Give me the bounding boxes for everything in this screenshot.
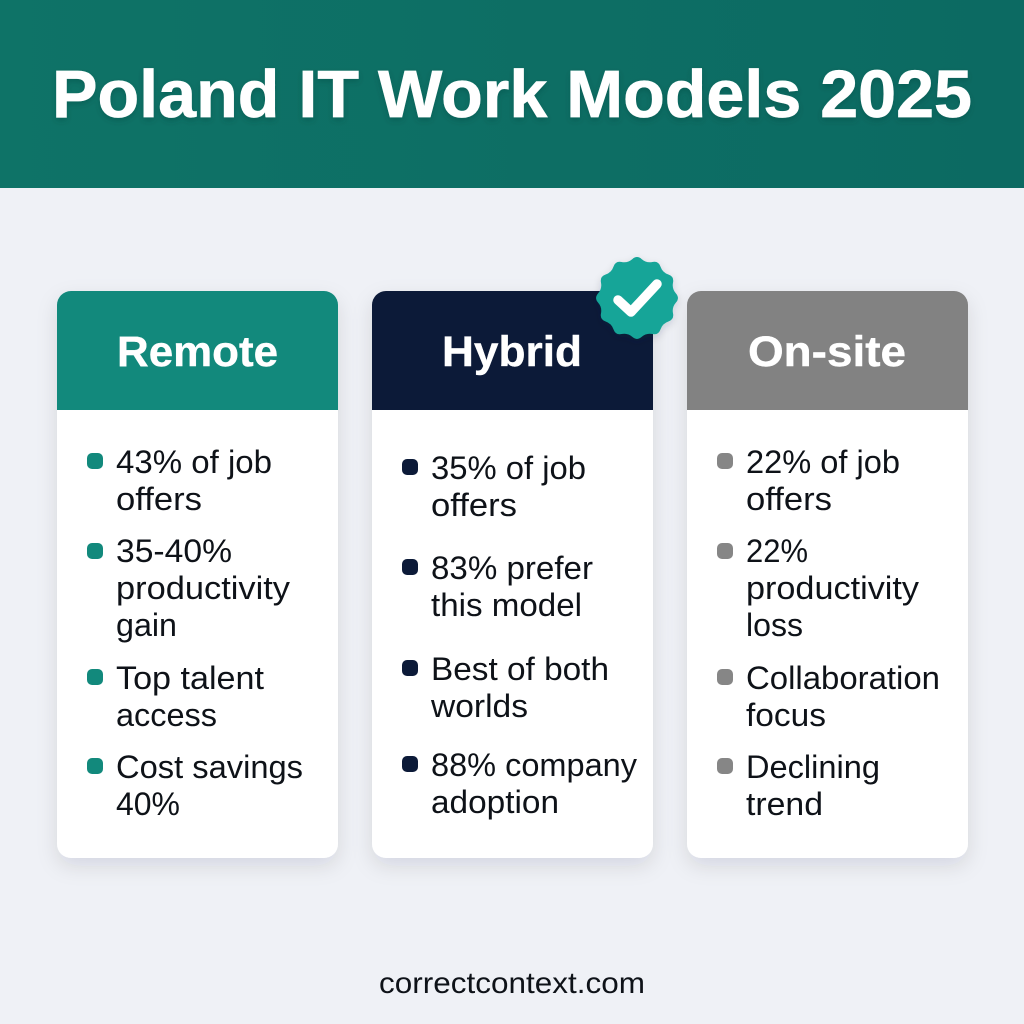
remote bullet list: productivity xyxy=(116,570,291,606)
remote bullet list: gain xyxy=(116,607,177,643)
remote bullet list: Top talent xyxy=(116,660,264,696)
hybrid bullet list: worlds xyxy=(430,688,528,724)
on-site bullet list: trend xyxy=(746,786,823,822)
hybrid header: Hybrid xyxy=(442,328,582,376)
footer website: correctcontext.com xyxy=(379,967,645,1000)
on-site bullet list: Collaboration xyxy=(746,660,940,696)
on-site bullet list: 22% xyxy=(746,533,808,569)
hybrid bullet list: this model xyxy=(431,587,582,623)
on-site header: On-site xyxy=(748,328,906,376)
hybrid bullet list: adoption xyxy=(431,784,559,820)
on-site bullet list: focus xyxy=(746,697,826,733)
on-site bullet list: offers xyxy=(746,481,832,517)
on-site bullet list: productivity xyxy=(746,570,920,606)
remote header: Remote xyxy=(117,328,278,376)
remote bullet list: 43% of job xyxy=(116,444,272,480)
on-site bullet list: Declining xyxy=(746,749,880,785)
remote bullet list: Cost savings xyxy=(116,749,303,785)
panel: on-site xyxy=(687,291,968,858)
hybrid bullet list: 83% prefer xyxy=(431,550,593,586)
on-site bullet list xyxy=(717,444,940,822)
hybrid bullet list: Best of both xyxy=(431,651,609,687)
header banner xyxy=(0,0,1024,188)
icon: recommended check badge xyxy=(596,257,678,339)
on-site bullet list: 22% of job xyxy=(746,444,900,480)
on-site header xyxy=(687,291,968,410)
remote bullet list: access xyxy=(116,697,217,733)
panel: remote xyxy=(57,291,338,858)
hybrid bullet list: offers xyxy=(431,487,517,523)
remote header xyxy=(57,291,338,410)
hybrid bullet list xyxy=(402,450,638,820)
remote bullet list: 35-40% xyxy=(116,533,232,569)
hybrid bullet list: 35% of job xyxy=(431,450,586,486)
remote bullet list: offers xyxy=(116,481,202,517)
on-site bullet list: loss xyxy=(746,607,803,643)
hybrid bullet list: 88% company xyxy=(431,747,638,783)
remote bullet list xyxy=(87,444,303,822)
hybrid header xyxy=(372,291,653,410)
title: Poland IT Work Models 2025 xyxy=(52,57,972,132)
panel: hybrid xyxy=(372,291,653,858)
remote bullet list: 40% xyxy=(116,786,180,822)
